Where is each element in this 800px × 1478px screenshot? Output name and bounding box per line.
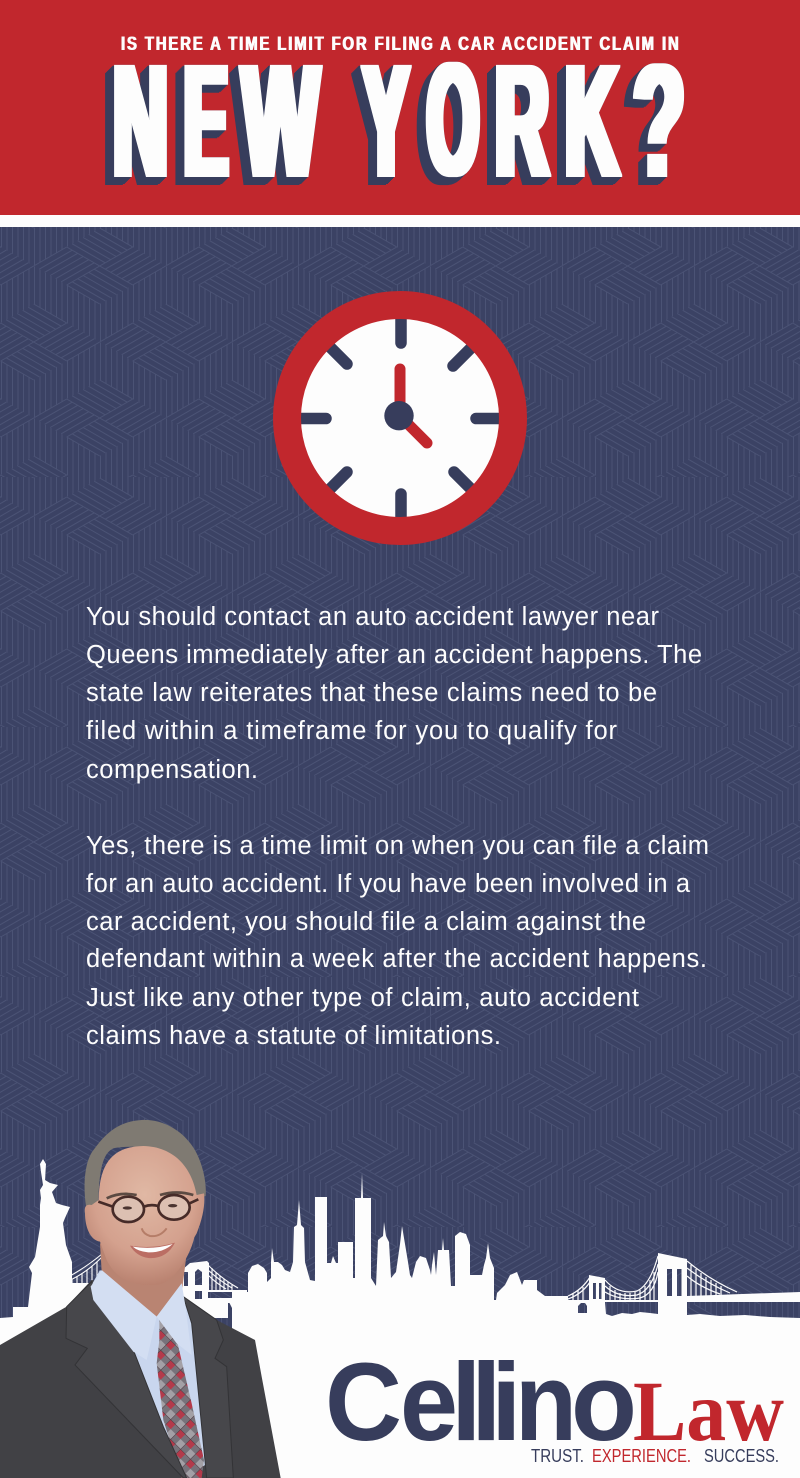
logo word: Cellino: l [451,1341,482,1464]
downtown skyline [232,1173,800,1478]
heading: NEW YORK?: N [113,31,168,210]
suit [0,1280,281,1478]
tagline [531,1445,779,1466]
text block: first paragraph: compensation. [86,756,258,784]
clock tick marks [290,310,510,526]
heading: NEW YORK?: E [184,31,228,210]
logo: Cellino Law [325,1341,784,1466]
tagline: TRUST. [531,1445,584,1466]
text block: second paragraph: Just like any other type of claim, auto accident [86,984,639,1012]
water and openings under the right bridge [208,1269,800,1318]
heading: NEW YORK?: Y [363,31,409,210]
text block: second paragraph: claims have a statute of limitations. [86,1022,501,1050]
logo word: Law: Law [633,1363,784,1459]
text block: first paragraph [86,603,702,784]
hair [85,1120,206,1207]
heading: NEW YORK?: K [565,31,619,210]
right lapel [183,1297,233,1478]
logo word: Cellino: n [515,1341,577,1464]
panel: red header banner [0,0,800,227]
logo word: Cellino: i [491,1341,522,1464]
face [85,1146,204,1285]
illustration: white New York skyline [0,1159,800,1478]
logo word: Cellino: C [325,1341,402,1464]
tie [157,1317,204,1478]
clock hands [400,369,427,443]
logo word: Cellino: l [471,1341,502,1464]
collar [91,1270,157,1360]
glasses [98,1195,198,1222]
smile [130,1243,175,1258]
eyebrows [107,1192,193,1198]
tagline: EXPERIENCE. [592,1445,691,1466]
logo word: Cellino: o [571,1341,637,1464]
eyes [123,1204,177,1210]
heading: NEW YORK?: R [495,31,549,210]
text block: first paragraph: filed within a timeframe for you to qualify for [86,717,618,745]
waterfront buildings near left bridge [205,1298,248,1318]
tagline: SUCCESS. [704,1445,779,1466]
text block: second paragraph: Yes, there is a time limit on when you can file a claim [86,832,709,860]
shirt [91,1270,207,1478]
text block: first paragraph: You should contact an auto accident lawyer near [86,603,660,631]
neck [100,1243,187,1318]
heading: NEW YORK?: O [427,30,479,208]
icon: clock [287,305,513,531]
logo word: Cellino: e [400,1341,458,1464]
text block: second paragraph: defendant within a week after the accident happens. [86,945,707,973]
clock ring [287,305,513,531]
text block: first paragraph: state law reiterates that these claims need to be [86,679,657,707]
left bridge tower and deck [182,1261,247,1320]
heading: subtitle line: IS THERE A TIME LIMIT FOR FILING A CAR ACCIDENT CLAIM IN [121,33,679,54]
heading: NEW YORK?: W [242,31,319,210]
left bridge cables [68,1254,238,1290]
nose shadow [142,1228,167,1236]
left lapel [66,1282,187,1478]
text block: second paragraph: car accident, you should file a claim against the [86,908,646,936]
logo word: Cellino [325,1341,637,1464]
heading: NEW YORK?: ? [633,31,685,210]
heading: NEW YORK? [113,30,685,210]
left bridge tower openings [184,1269,202,1299]
text block: second paragraph: for an auto accident. If you have been involved in a [86,870,691,898]
right bridge cables [568,1256,737,1300]
portrait: attorney in suit [0,1120,281,1478]
statue of liberty and left shore [0,1159,180,1478]
clock hub [384,401,414,430]
text block: first paragraph: Queens immediately after an accident happens. The [86,641,702,669]
text block: second paragraph [86,832,709,1050]
